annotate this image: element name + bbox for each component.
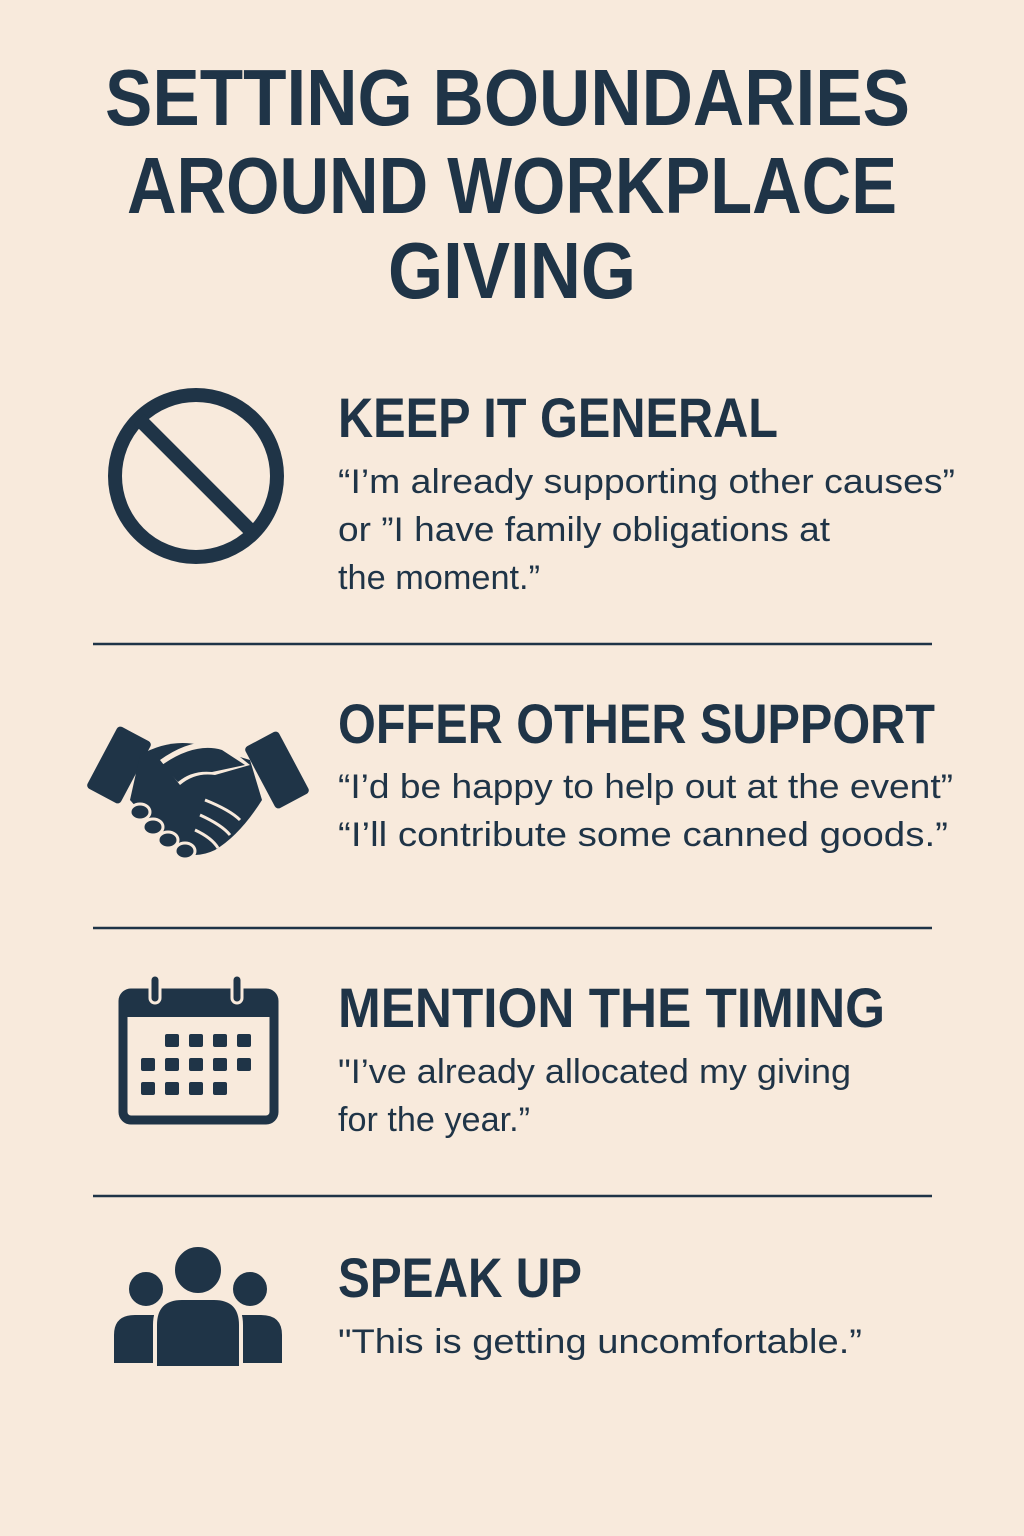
icon: handshake (86, 725, 310, 859)
text: keep it general quote (338, 463, 955, 597)
text: offer other support quote: “I’ll contribute some canned goods.” (338, 816, 948, 854)
title: GIVING (388, 226, 636, 315)
heading: keep it general: KEEP IT GENERAL (338, 386, 778, 449)
text: keep it general quote: “I’m already supporting other causes” (338, 463, 955, 501)
text: timing quote (338, 1053, 851, 1139)
title (105, 53, 910, 315)
heading: speak up: SPEAK UP (338, 1246, 582, 1309)
title: SETTING BOUNDARIES (105, 53, 910, 142)
text: offer other support quote: “I’d be happy to help out at the event” (338, 768, 953, 806)
text: speak up quote: "This is getting uncomfortable.” (338, 1323, 862, 1361)
section: mention the timing (123, 975, 885, 1139)
text: offer other support quote (338, 768, 953, 854)
text: timing quote: for the year.” (338, 1101, 530, 1139)
icon: prohibition sign (115, 395, 277, 557)
icon: group of people (112, 1245, 284, 1368)
title: AROUND WORKPLACE (127, 141, 897, 230)
section: offer other support (86, 692, 953, 859)
section: keep it general (115, 386, 955, 597)
heading: mention the timing: MENTION THE TIMING (338, 976, 885, 1039)
section: speak up (112, 1245, 862, 1368)
text: timing quote: "I’ve already allocated my giving (338, 1053, 851, 1091)
heading: offer other support: OFFER OTHER SUPPORT (338, 692, 935, 755)
text: keep it general quote: or ”I have family obligations at (338, 511, 831, 549)
text: keep it general quote: the moment.” (338, 559, 540, 597)
icon: calendar (123, 975, 274, 1120)
